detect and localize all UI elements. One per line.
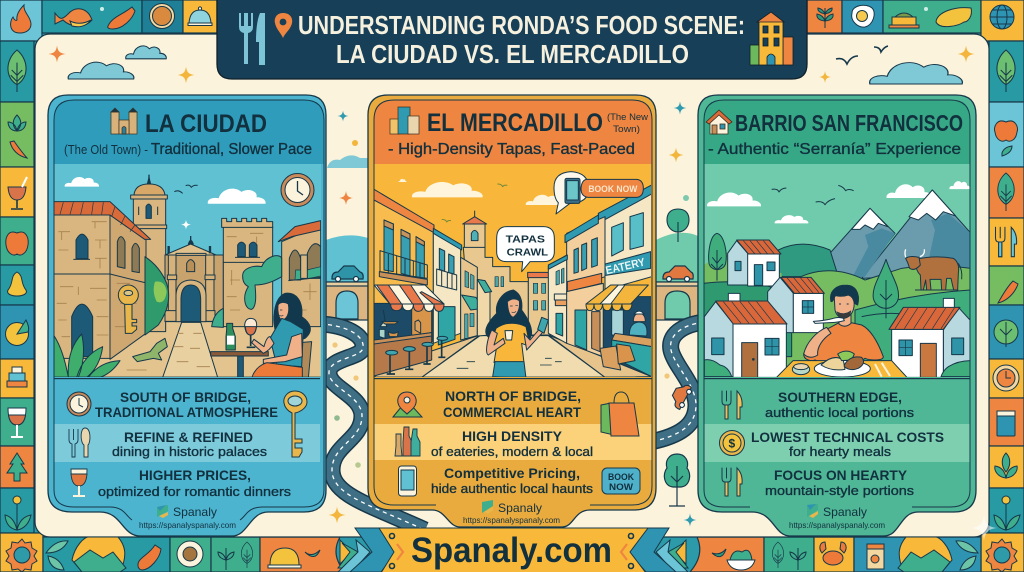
ribbon tail left: [338, 528, 396, 572]
banner dots: [390, 534, 634, 568]
icon: right flower: [994, 496, 1020, 530]
icon: bottom right herbs: [772, 542, 806, 570]
icon: left sun: [6, 539, 37, 572]
icon: fork and spoon: [69, 428, 90, 457]
icon: bottom right crab: [820, 542, 846, 565]
clock icon in sky: [281, 174, 314, 206]
icon: left wine: [8, 408, 26, 437]
icon: right sprig: [995, 453, 1017, 478]
panel three subtitle: - Authentic “Serranía” Experience: [708, 141, 961, 158]
header banner: [217, 0, 807, 79]
row three text: [431, 465, 594, 496]
icon: fried egg: [852, 5, 874, 27]
icon: left pie: [6, 320, 29, 346]
icon: clock: [67, 392, 91, 416]
icon: coin: [720, 430, 744, 456]
row one text: COMMERCIAL HEART: [443, 404, 581, 420]
info rows: [374, 378, 652, 496]
icon: fork and knife: [722, 391, 742, 419]
banner ribbon: [379, 528, 648, 572]
icon: right round leaf: [994, 320, 1018, 347]
icon: fork and knife: [722, 468, 742, 496]
icon: location pin: [393, 392, 422, 417]
icon: right leaf on orange: [998, 173, 1014, 211]
bridge left with car: [326, 235, 368, 320]
icon: right sun: [986, 539, 1017, 572]
row one text: TRADITIONAL ATMOSPHERE: [95, 404, 278, 420]
decorative clouds, birds and sparkles: [48, 46, 974, 526]
row three text: [765, 467, 915, 498]
icon: left pear: [8, 272, 26, 296]
info rows: [704, 378, 970, 498]
icon: coin: $: [728, 436, 736, 450]
border: left column cells: [0, 41, 43, 572]
button: book now: BOOK: [608, 472, 634, 483]
panel: El Mercadillo: [368, 95, 660, 527]
brand: Spanaly logo and url: [463, 500, 560, 525]
cloud top left small: [126, 46, 166, 59]
icon: cheese: [936, 8, 971, 27]
icon: left chili: [10, 141, 27, 158]
panel three inner frame line: [704, 100, 970, 507]
brand: Spanaly logo and url: [139, 505, 236, 530]
row two text: [112, 429, 268, 459]
row three text: hide authentic local haunts: [431, 481, 594, 496]
panel two subtitle: - High-Density Tapas, Fast-Paced: [388, 141, 635, 158]
scene: busy tapas street: EATERY: [605, 256, 647, 277]
icon: phone: [398, 466, 416, 496]
row two text: for hearty meals: [789, 444, 892, 459]
icon: right apple: [994, 121, 1018, 156]
bridge right with car: [656, 233, 698, 320]
row two text: [431, 428, 593, 459]
row three text: FOCUS ON HEARTY: [774, 467, 908, 483]
panel one title: LA CIUDAD: [145, 110, 267, 138]
icon: left herb: [8, 115, 26, 131]
brand: Spanaly logo and url: Spanaly: [173, 505, 217, 519]
ribbon tail right: [628, 528, 688, 572]
panel two note: [607, 112, 648, 135]
icon: large key: [284, 391, 307, 457]
row three text: Competitive Pricing,: [444, 465, 580, 481]
icon: bottom left mountain scene: [46, 537, 126, 572]
icon: globe: [990, 5, 1014, 29]
icon: left cocktail: [8, 177, 27, 209]
icon: herb: [817, 8, 833, 28]
icon: townhouse: [750, 12, 793, 65]
row one text: [443, 388, 581, 420]
panel two inner frame line: [374, 100, 652, 505]
icon: car on road: [668, 381, 694, 411]
panel one subtitle: Traditional, Slower Pace: [151, 141, 312, 158]
icon: cloche: [188, 7, 212, 26]
icon: tree between panels bottom: [664, 454, 690, 506]
row one text: SOUTHERN EDGE,: [778, 389, 902, 405]
row two text: dining in historic palaces: [112, 444, 268, 459]
icon: flame: [11, 5, 31, 33]
scene: mountain village meal: [704, 164, 970, 377]
panel three heading band: [704, 100, 970, 164]
title: UNDERSTANDING RONDA’S FOOD SCENE:: [298, 10, 745, 40]
brand: Spanaly logo and url: Spanaly: [823, 505, 867, 519]
icon: left leaf: [8, 50, 26, 92]
panel: La Ciudad: [48, 95, 330, 536]
icon: wine glass: [71, 469, 87, 496]
panel three title: BARRIO SAN FRANCISCO: [735, 110, 963, 136]
winding road left: [320, 324, 425, 530]
row one text: authentic local portions: [765, 405, 915, 420]
icon: city buildings: [390, 107, 419, 134]
icon: left flower: [5, 496, 31, 530]
row one text: SOUTH OF BRIDGE,: [120, 389, 251, 405]
panel two title: EL MERCADILLO: [427, 109, 603, 137]
row two text: of eateries, modern & local: [431, 444, 593, 459]
icon: bread: [150, 4, 174, 28]
icon: house: [706, 110, 732, 134]
title: [298, 10, 745, 69]
scene: busy tapas street: BOOK NOW: [588, 184, 638, 194]
icon: dot right: [924, 7, 928, 11]
icon: fish: [55, 9, 92, 27]
panel two heading band: [374, 100, 652, 164]
icon: bottom right salad: [712, 549, 755, 570]
icon: shopping bag: [601, 392, 639, 436]
icon: right clock: [993, 365, 1019, 391]
scene: busy tapas street: [370, 160, 660, 380]
icon: fork: [239, 13, 253, 64]
row three text: HIGHER PRICES,: [139, 467, 251, 483]
scene: old town street: [50, 160, 330, 380]
sparkles: [48, 46, 974, 526]
row one text: [765, 389, 915, 420]
row two text: [751, 429, 944, 459]
row three text: mountain-style portions: [765, 483, 915, 498]
row two text: LOWEST TECHNICAL COSTS: [751, 429, 944, 445]
winding road right: [650, 322, 704, 442]
row one text: NORTH OF BRIDGE,: [445, 388, 581, 404]
icon: right chili: [998, 281, 1018, 303]
scene: busy tapas street: CRAWL: [507, 248, 548, 259]
brand name: Spanaly.com: [411, 531, 612, 570]
brand: Spanaly logo and url: https://spanalyspanaly.com: [789, 520, 885, 530]
panel one subtitle: (The Old Town) -: [64, 143, 148, 157]
icon: bottles: [395, 427, 420, 456]
border: bottom row cells: [43, 537, 981, 572]
icon: map pin: [275, 13, 292, 38]
birds top right: [836, 46, 888, 64]
footer banner: [338, 528, 688, 572]
icon: dot: [100, 7, 104, 11]
icon: tree between panels top: [667, 209, 689, 242]
row three text: optimized for romantic dinners: [98, 484, 292, 499]
icon: right leaf: [997, 50, 1015, 92]
icon: bottom right mountain scene: [898, 537, 978, 572]
icon: casserole dish: [889, 13, 919, 28]
cloud top left large: [68, 62, 134, 79]
panel two note: Town): [613, 124, 640, 135]
icon: knife: [256, 13, 265, 65]
panel one subtitle: [64, 141, 312, 158]
icon: left tree: [7, 453, 27, 481]
row two text: REFINE & REFINED: [124, 429, 253, 445]
icon: bottom left plate: [177, 541, 203, 567]
icon: bottom left cloche: [268, 548, 320, 568]
button: book now: [602, 468, 640, 494]
title: LA CIUDAD VS. EL MERCADILLO: [336, 39, 689, 69]
row one text: [95, 389, 278, 420]
icon: eggplant: [108, 7, 135, 29]
brand: Spanaly logo and url: https://spanalyspanaly.com: [463, 515, 560, 525]
row three text: [98, 467, 292, 499]
row two text: HIGH DENSITY: [462, 428, 563, 444]
watermark sparkle: [971, 515, 997, 541]
cloud between panels one and two: [327, 155, 368, 168]
icon: castle: [111, 108, 137, 134]
border: top row cells: [0, 0, 1024, 41]
banner chevrons: [397, 544, 627, 560]
brand: Spanaly logo and url: [789, 504, 885, 530]
panel one heading band: [54, 100, 324, 164]
icon: right fork and knife: [996, 227, 1017, 257]
button: book now: NOW: [609, 482, 633, 493]
scene: busy tapas street: TAPAS: [506, 234, 545, 245]
brand: Spanaly logo and url: Spanaly: [498, 501, 542, 515]
key icon and info rows: [54, 378, 320, 499]
border: right column cells: [981, 41, 1024, 572]
brand: Spanaly logo and url: https://spanalyspanaly.com: [139, 520, 236, 530]
icon: right jar: [997, 411, 1015, 436]
icon: bottom left herbs: [218, 542, 253, 570]
cloud top right: [870, 63, 962, 84]
icon: left apple: [6, 232, 28, 255]
icon: bottom left eggplant: [138, 545, 161, 570]
panel one inner frame line: [54, 100, 324, 520]
icon: left cake: [7, 367, 27, 387]
icon: bottom right packet: [867, 544, 884, 569]
panel: Barrio San Francisco: [695, 95, 980, 536]
panel two note: (The New: [607, 112, 648, 123]
